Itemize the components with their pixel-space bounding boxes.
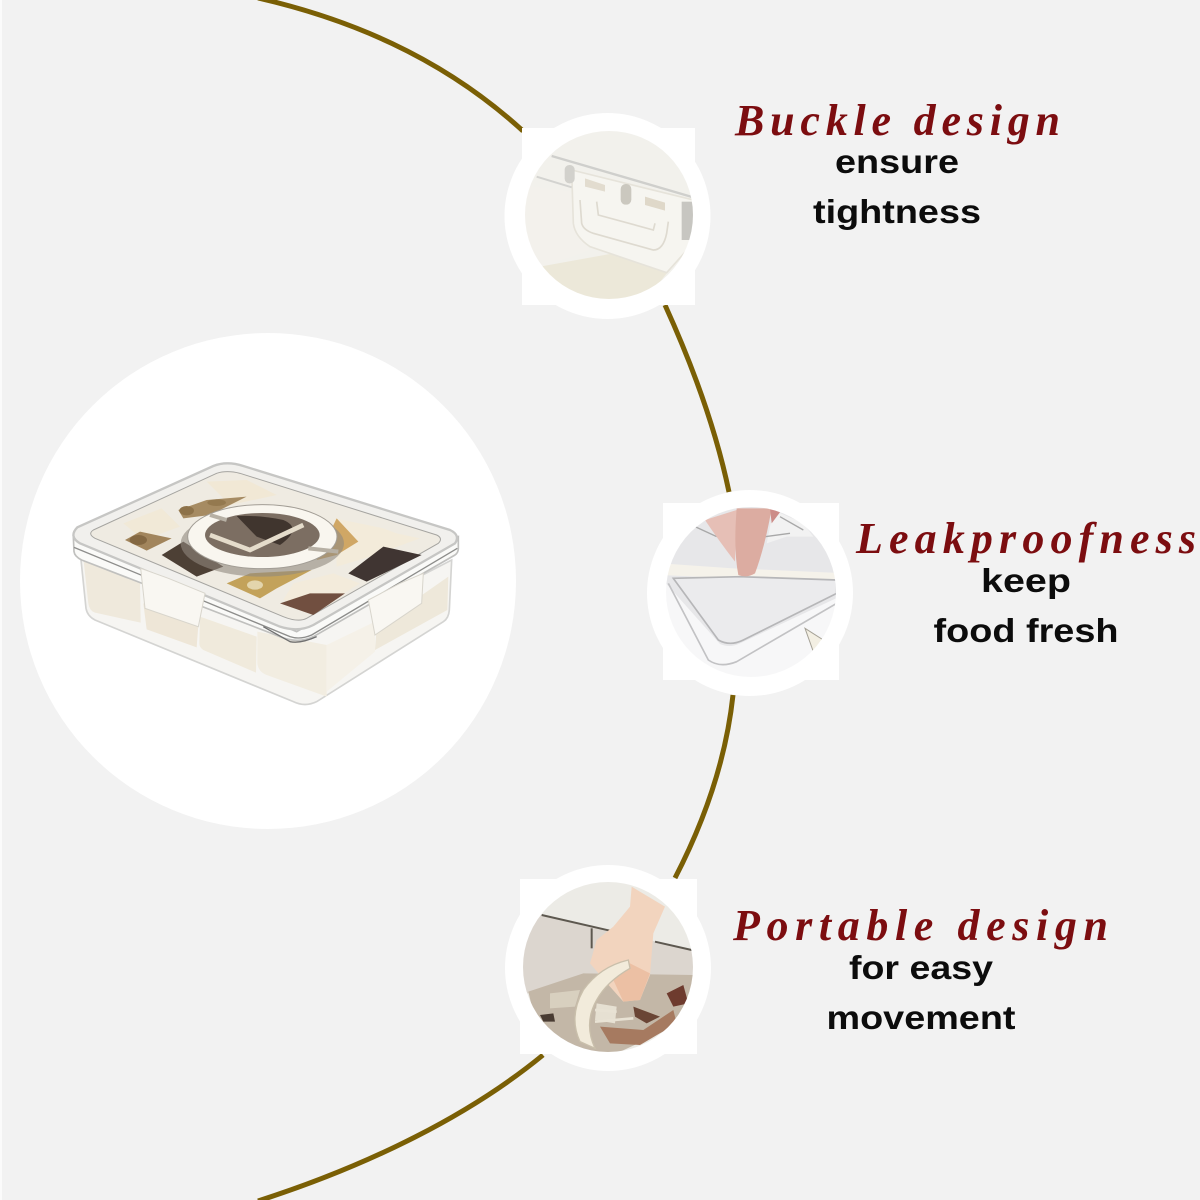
food: red-brown front [280,593,345,615]
central dish [181,505,344,577]
lid top [73,463,457,629]
golden arc connector [258,0,733,1200]
food: dark right [348,547,422,582]
lid rim side [73,537,458,640]
feature 3 heading and text: Portable design [732,901,1108,950]
compartments [207,480,277,505]
left latch [141,568,205,627]
feature 1 heading and text: Buckle design [734,96,1060,145]
cream inner blocks [83,558,141,623]
food: gold front [227,570,312,598]
amber food right of centre [317,518,358,560]
food: dark left compartment [162,542,223,577]
feature 2 heading and text: food fresh [934,612,1118,649]
feature 2 heading and text: keep [981,562,1071,599]
feature 2 thumbnail: finger pressing seal [647,490,853,696]
feature 2 heading and text [855,514,1196,649]
feature 3 heading and text: for easy [849,949,994,986]
feature 3 heading and text [732,901,1108,1036]
feature 3 heading and text: movement [826,999,1016,1036]
feature 1 heading and text [734,96,1060,230]
main product circle [20,333,516,829]
feature 1 thumbnail: buckle close-up [504,113,710,319]
food: nuts top [178,497,247,518]
food: nuts left [125,532,172,551]
clear base [80,550,452,704]
feature 2 heading and text: Leakproofness [855,514,1196,563]
product photo: divided storage box [73,463,458,704]
right latch [368,573,423,635]
feature 1 heading and text: ensure [835,143,959,180]
feature 1 heading and text: tightness [813,193,981,230]
feature 3 thumbnail: hand lifting box [505,865,711,1071]
